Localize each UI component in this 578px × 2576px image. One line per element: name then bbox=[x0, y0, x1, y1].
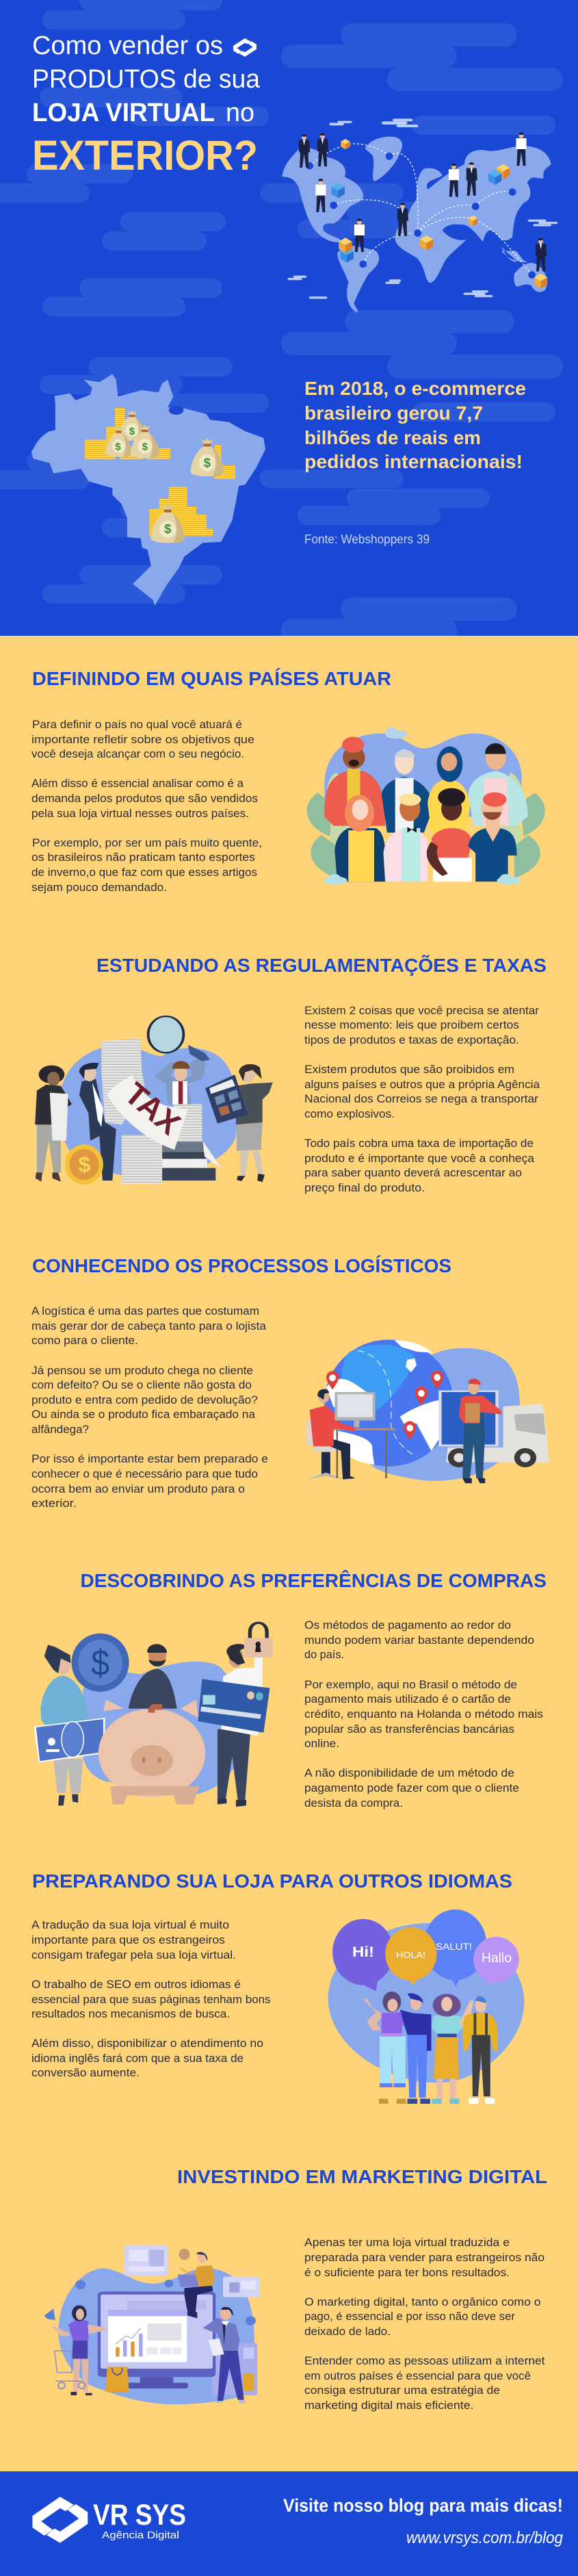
text block bbox=[304, 2237, 545, 2412]
chat card top left bbox=[124, 2245, 168, 2276]
world map illustration bbox=[282, 118, 557, 313]
call to action: Visite nosso blog para mais dicas! bbox=[283, 2495, 563, 2516]
man with laptop bbox=[178, 2252, 215, 2318]
piggy bank bbox=[98, 1699, 205, 1805]
woman with calculator bbox=[205, 1064, 273, 1182]
map: location dots bbox=[306, 153, 536, 279]
text block bbox=[31, 719, 262, 894]
text block: sejam pouco demandado. bbox=[31, 881, 167, 894]
title: no bbox=[226, 99, 254, 127]
person: boy in yellow bbox=[459, 1996, 498, 2104]
blog address: www.vrsys.com.br/blog bbox=[406, 2529, 564, 2547]
money: south cluster bbox=[149, 487, 213, 543]
person: red-haired woman bbox=[334, 795, 386, 881]
text block: produto e é importante que você a conheça bbox=[304, 1152, 535, 1165]
text block: online. bbox=[304, 1738, 339, 1750]
text block: A não disponibilidade de um método de bbox=[304, 1767, 514, 1779]
text block: consigam trafegar pela sua loja virtual. bbox=[31, 1949, 236, 1961]
text block: os brasileiros não praticam tanto esportes bbox=[31, 851, 255, 864]
text block: Por exemplo, por ser um país muito quente, bbox=[32, 837, 262, 849]
logo: VR SYS: VR SYS bbox=[93, 2499, 186, 2532]
money: north cluster: $ bbox=[129, 426, 135, 437]
heading: DESCOBRINDO AS PREFERÊNCIAS DE COMPRAS bbox=[81, 1570, 547, 1591]
delivery woman bbox=[459, 1378, 501, 1483]
section: processos logísticos bbox=[31, 1255, 549, 1510]
title: Como vender os bbox=[32, 31, 223, 60]
text block: como explosivos. bbox=[304, 1108, 395, 1120]
bubble labels: HOLA! bbox=[396, 1950, 425, 1960]
text block: importante refletir sobre os objetivos que bbox=[31, 734, 254, 746]
illustration: global logistics bbox=[306, 1339, 549, 1483]
map: dashed routes bbox=[310, 144, 532, 275]
bubble labels: Hallo bbox=[482, 1951, 512, 1966]
money: north cluster: $ bbox=[115, 441, 121, 452]
shopping bag bbox=[105, 2367, 129, 2392]
illustration: tax paperwork bbox=[35, 1016, 273, 1185]
text block: ocorra bem ao enviar um produto para o bbox=[31, 1483, 245, 1495]
text block: como para o cliente. bbox=[31, 1335, 138, 1347]
text block: essencial para que suas páginas tenham bons bbox=[31, 1994, 271, 2006]
text block bbox=[304, 1005, 540, 1194]
truck bbox=[438, 1391, 549, 1467]
text block: Por exemplo, aqui no Brasil o método de bbox=[304, 1679, 517, 1691]
text block bbox=[304, 1619, 543, 1809]
analytics card bbox=[108, 2310, 187, 2362]
text block bbox=[31, 1305, 268, 1510]
text block: exterior. bbox=[31, 1497, 77, 1510]
text block: Além disso é essencial analisar como é a bbox=[31, 777, 244, 790]
text block: Todo país cobra uma taxa de importação de bbox=[304, 1137, 534, 1150]
heading: DEFININDO EM QUAIS PAÍSES ATUAR bbox=[32, 668, 391, 689]
person: man in teal jacket bbox=[468, 743, 528, 826]
text block: Nacional dos Correios se nega a transportar bbox=[304, 1093, 539, 1105]
text block: A logística é uma das partes que costumam bbox=[31, 1305, 259, 1317]
text block: consiga estruturar uma estratégia de bbox=[304, 2384, 500, 2397]
woman with afro bbox=[35, 1066, 72, 1182]
bubble labels: Hi! bbox=[352, 1944, 374, 1960]
map pins bbox=[326, 1371, 443, 1440]
title: PRODUTOS de sua bbox=[32, 65, 261, 94]
heading: CONHECENDO OS PROCESSOS LOGÍSTICOS bbox=[32, 1255, 451, 1276]
text block: O marketing digital, tanto o orgânico como o bbox=[304, 2296, 541, 2308]
heading: ESTUDANDO AS REGULAMENTAÇÕES E TAXAS bbox=[96, 955, 547, 976]
text block: Entender como as pessoas utilizam a internet bbox=[304, 2355, 545, 2367]
TAX paper: TAX bbox=[118, 1075, 187, 1142]
source note: Fonte: Webshoppers 39 bbox=[304, 532, 430, 546]
panel: blue hero bbox=[0, 0, 578, 636]
money: north cluster: $ bbox=[142, 441, 148, 452]
papers bbox=[101, 1038, 202, 1184]
text block: Existem 2 coisas que você precisa se atentar bbox=[304, 1005, 540, 1017]
section: preferências de compras bbox=[34, 1570, 547, 1809]
text block: Por isso é importante estar bem preparado e bbox=[31, 1453, 268, 1465]
illustration: piggy bank and payments: $ bbox=[91, 1643, 109, 1683]
coin bbox=[65, 1144, 103, 1185]
monitor bbox=[98, 2291, 215, 2388]
text block: preço final do produto. bbox=[304, 1182, 425, 1194]
globe bbox=[324, 1339, 454, 1467]
text block: Apenas ter uma loja virtual traduzida e bbox=[304, 2237, 510, 2249]
shopping cart bbox=[55, 2351, 85, 2388]
illustration: piggy bank and payments bbox=[34, 1623, 273, 1807]
section: definindo países bbox=[31, 668, 545, 894]
heading: PREPARANDO SUA LOJA PARA OUTROS IDIOMAS bbox=[32, 1870, 512, 1892]
map: parcels bbox=[331, 139, 547, 289]
map: business people bbox=[299, 132, 547, 272]
text block: Os métodos de pagamento ao redor do bbox=[304, 1619, 511, 1632]
statistic callout: Em 2018, o e-commerce bbox=[304, 378, 526, 399]
map: small clouds bbox=[287, 118, 557, 299]
illustration: diverse people bbox=[307, 727, 545, 885]
text block: deixado de lado. bbox=[304, 2326, 391, 2338]
person: woman with afro hair bbox=[427, 788, 472, 881]
dollar coin bbox=[72, 1634, 129, 1692]
text block: nesse momento: leis que proibem certos bbox=[304, 1019, 519, 1031]
text block bbox=[31, 1919, 271, 2079]
text block: Já pensou se um produto chega no cliente bbox=[31, 1365, 253, 1377]
magnifying glass bbox=[148, 1016, 210, 1061]
text block: importante para que os estrangeiros bbox=[31, 1934, 225, 1946]
section: regulamentações e taxas bbox=[35, 955, 547, 1194]
text block: Além disso, disponibilizar o atendimento no bbox=[31, 2037, 263, 2050]
man in navy suit bbox=[79, 1063, 116, 1181]
text block: O trabalho de SEO em outros idiomas é bbox=[31, 1979, 241, 1991]
text block: em outros países é essencial para que você bbox=[304, 2370, 531, 2382]
bubble labels: SALUT! bbox=[436, 1941, 472, 1952]
text block: A tradução da sua loja virtual é muito bbox=[31, 1919, 229, 1931]
text block: desista da compra. bbox=[304, 1797, 403, 1809]
illustration: tax paperwork: $ bbox=[78, 1152, 91, 1177]
text block: mais gerar dor de cabeça tanto para o lojista bbox=[31, 1320, 267, 1332]
chat card top right bbox=[223, 2277, 260, 2297]
bubble labels bbox=[352, 1941, 512, 1966]
text block: resultados nos mecanismos de busca. bbox=[31, 2008, 230, 2020]
text block: Para definir o país no qual você atuará é bbox=[32, 719, 242, 731]
map: continents bbox=[282, 137, 551, 313]
person: turban man bbox=[324, 737, 385, 826]
text block: para saber quanto deverá acrescentar ao bbox=[304, 1167, 522, 1179]
bearded man bbox=[129, 1644, 177, 1709]
text block: pago, é essencial e por isso não deve ser bbox=[304, 2310, 516, 2323]
Brazil map with money bags bbox=[31, 374, 265, 606]
woman with bill bbox=[34, 1645, 105, 1805]
logo: VR SYS: Agência Digital bbox=[102, 2529, 179, 2541]
man with clipboard bbox=[202, 2306, 245, 2404]
money: east cluster bbox=[191, 439, 235, 479]
text block: Existem produtos que são proibidos em bbox=[304, 1064, 514, 1076]
woman with megaphone bbox=[44, 2305, 107, 2395]
text block: preparada para vender para estrangeiros não bbox=[304, 2252, 544, 2264]
text block: tipos de produtos e taxas de exportação. bbox=[304, 1034, 519, 1046]
money: east cluster: $ bbox=[204, 456, 211, 470]
text block: pela sua loja virtual nesses outros países. bbox=[31, 808, 249, 820]
text block: alguns países e outros que a própria Agência bbox=[304, 1079, 540, 1091]
logo: VR SYS bbox=[32, 2497, 186, 2543]
text block: crédito, enquanto na Holanda o método mais bbox=[304, 1708, 543, 1721]
person: man with bow tie bbox=[383, 793, 428, 881]
text block: alfândega? bbox=[31, 1424, 89, 1436]
man with card and padlock bbox=[198, 1623, 273, 1807]
statistic callout bbox=[304, 378, 526, 472]
text block: marketing digital mais eficiente. bbox=[304, 2399, 473, 2412]
footer bbox=[0, 2471, 578, 2576]
text block: de inverno,o que faz com que esses artigos bbox=[31, 866, 257, 879]
man in blue shirt bbox=[154, 1056, 206, 1104]
text block: idioma inglês fará com que a sua taxa de bbox=[31, 2052, 244, 2065]
person: boy in navy bbox=[400, 1993, 432, 2104]
text block: demanda pelos produtos que são vendidos bbox=[31, 793, 258, 805]
money: north cluster bbox=[85, 408, 170, 459]
map: Brazil silhouette bbox=[31, 374, 265, 606]
money: south cluster: $ bbox=[164, 522, 171, 536]
title: LOJA VIRTUAL bbox=[32, 99, 215, 127]
text block: você deseja alcançar com o seu negócio. bbox=[31, 748, 244, 760]
section: outros idiomas bbox=[31, 1870, 524, 2104]
person: woman with hijab bbox=[428, 747, 470, 833]
statistic callout: brasileiro gerou 7,7 bbox=[304, 402, 483, 424]
text block: mundo podem variar bastante dependendo bbox=[304, 1634, 534, 1647]
text block: conversão aumente. bbox=[31, 2067, 140, 2079]
icons: like and play bubbles bbox=[75, 2249, 256, 2326]
bubbles bbox=[332, 1909, 519, 1991]
side device bbox=[212, 2343, 257, 2395]
statistic callout: bilhões de reais em bbox=[304, 427, 481, 448]
route dashes bbox=[358, 1350, 417, 1456]
statistic callout: pedidos internacionais! bbox=[304, 451, 523, 472]
text block: é o suficiente para ter bons resultados. bbox=[304, 2267, 510, 2279]
person: girl in purple bbox=[363, 1992, 407, 2104]
text block: com defeito? Ou se o cliente não gosta do bbox=[31, 1379, 252, 1391]
text block: pagamento mais utilizado é o cartão de bbox=[304, 1693, 511, 1705]
man at desk bbox=[306, 1389, 395, 1480]
heading: INVESTINDO EM MARKETING DIGITAL bbox=[177, 2166, 547, 2187]
text block: do país. bbox=[304, 1649, 344, 1661]
person: grey-haired man bbox=[382, 749, 434, 833]
icon: VR SYS logo in title bbox=[233, 38, 257, 57]
text block: pagamento pode fazer com que o cliente bbox=[304, 1782, 519, 1794]
text block: popular são as transferências bancárias bbox=[304, 1723, 514, 1736]
illustration: digital marketing dashboard bbox=[44, 2245, 260, 2404]
person: bearded man bbox=[468, 793, 517, 881]
section: marketing digital bbox=[44, 2166, 547, 2412]
text block: Ou ainda se o produto fica embaraçado na bbox=[31, 1408, 256, 1421]
title: EXTERIOR? bbox=[32, 132, 258, 179]
books bbox=[162, 1141, 221, 1181]
person: girl in teal bbox=[432, 1994, 462, 2104]
text block: produto e entra com pedido de devolução? bbox=[31, 1394, 258, 1406]
text block: conhecer o que é necessário para que tudo bbox=[31, 1468, 258, 1480]
illustration: speech bubbles and people bbox=[328, 1909, 524, 2104]
title bbox=[32, 31, 261, 179]
